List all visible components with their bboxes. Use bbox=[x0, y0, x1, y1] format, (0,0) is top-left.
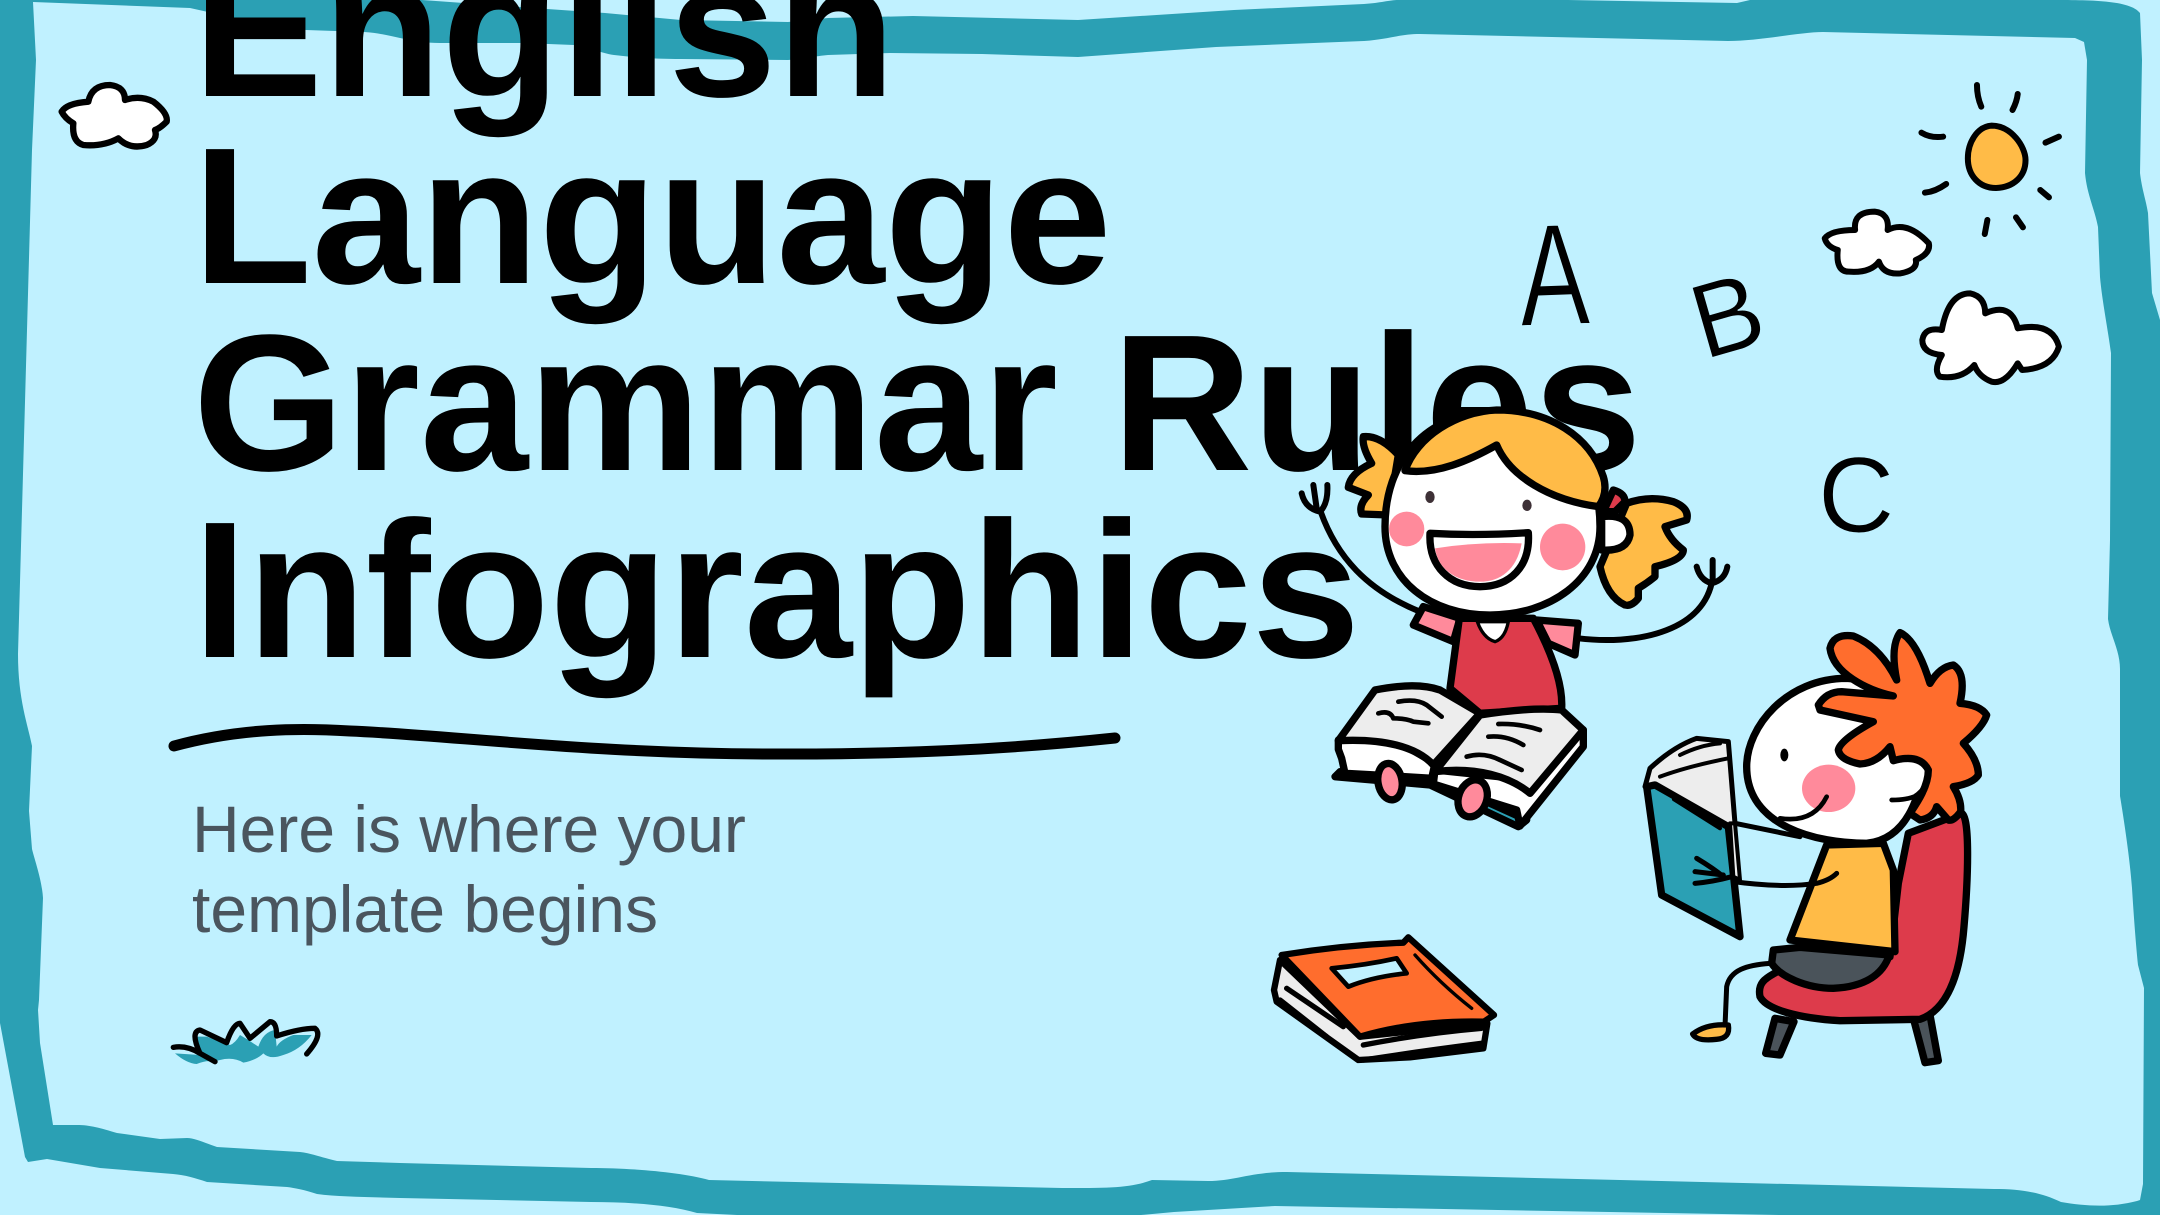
boy upper arm bbox=[1735, 823, 1800, 837]
girl mouth bbox=[1430, 533, 1529, 587]
book cover window bbox=[1332, 958, 1407, 987]
boy hair bbox=[1818, 633, 1987, 820]
chair bbox=[1759, 813, 1968, 1021]
title: Language bbox=[193, 108, 1112, 325]
boy shirt bbox=[1790, 843, 1895, 952]
boy book bbox=[1645, 738, 1740, 937]
boy ear bbox=[1883, 759, 1928, 800]
letter A: A bbox=[1516, 193, 1592, 357]
boy smile bbox=[1780, 797, 1827, 819]
title: Grammar Rules bbox=[193, 295, 1642, 512]
boy lower arm and hand bbox=[1695, 858, 1837, 885]
subtitle: template begins bbox=[192, 872, 658, 946]
subtitle: Here is where your bbox=[192, 792, 746, 866]
title: Infographics bbox=[193, 482, 1360, 699]
girl cheeks bbox=[1389, 512, 1585, 570]
icon: middle cloud bbox=[1825, 212, 1929, 274]
girl book bbox=[1335, 686, 1583, 827]
letter B: B bbox=[1678, 250, 1777, 382]
girl right pigtail bbox=[1600, 499, 1687, 605]
girl hair fringe bbox=[1405, 410, 1605, 507]
book spine line bbox=[1415, 955, 1472, 1008]
girl arms bbox=[1302, 485, 1727, 640]
illustration: orange closed book bbox=[1274, 937, 1494, 1060]
boy leg and foot bbox=[1725, 963, 1770, 1027]
icon: large cloud bbox=[1922, 293, 2059, 382]
chair legs bbox=[1766, 1015, 1938, 1063]
book page lines bbox=[1280, 988, 1482, 1060]
book pages bbox=[1274, 960, 1487, 1060]
boy trousers bbox=[1772, 947, 1889, 988]
boy eye bbox=[1780, 749, 1788, 761]
girl feet bbox=[1375, 762, 1405, 802]
boy ear line bbox=[1892, 790, 1925, 800]
illustration: girl reading open book bbox=[1302, 410, 1727, 827]
girl dress bbox=[1450, 618, 1562, 713]
icon: small cloud top left bbox=[62, 85, 167, 146]
boy head bbox=[1747, 678, 1924, 843]
girl eyes bbox=[1425, 491, 1532, 511]
girl left pigtail bbox=[1348, 437, 1398, 515]
letter C: C bbox=[1818, 434, 1894, 555]
icon: sun bbox=[1921, 85, 2059, 234]
girl sleeves bbox=[1413, 607, 1578, 655]
girl collar bbox=[1477, 622, 1508, 642]
girl head bbox=[1385, 412, 1600, 615]
boy cheek bbox=[1802, 765, 1855, 812]
girl ear bbox=[1602, 516, 1630, 550]
icon: grass tuft bbox=[173, 1022, 318, 1064]
book cover bbox=[1282, 937, 1494, 1037]
girl hair tie bbox=[1603, 490, 1625, 512]
illustration: boy on chair reading bbox=[1645, 633, 1987, 1063]
wavy divider line bbox=[174, 730, 1115, 754]
